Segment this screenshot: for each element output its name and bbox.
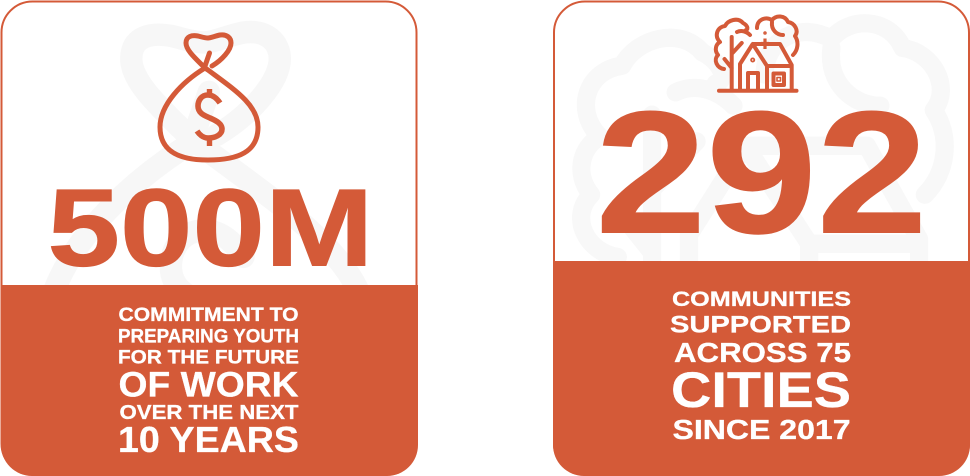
text: commitment description: 10 YEARS: [118, 419, 299, 460]
text: commitment description: PREPARING YOUTH: [118, 326, 299, 348]
text: communities description: ACROSS 75: [674, 337, 851, 368]
text: commitment description: FOR THE FUTURE: [118, 348, 299, 368]
icon: money bag: [160, 35, 258, 160]
watermark: house and trees: [581, 23, 945, 354]
figure: 500M: 500M: [48, 166, 374, 290]
figure: 292: 292: [596, 74, 928, 270]
icon: house and trees: [716, 16, 797, 91]
text: commitment description: [118, 305, 299, 460]
text: commitment description: OF WORK: [118, 366, 298, 404]
text: commitment description: OVER THE NEXT: [120, 402, 298, 424]
text: communities description: [670, 286, 851, 445]
watermark: money bag: [176, 120, 213, 141]
text: communities description: COMMUNITIES: [672, 286, 851, 311]
text: communities description: CITIES: [671, 361, 851, 418]
text: communities description: SUPPORTED: [670, 312, 851, 339]
text: communities description: SINCE 2017: [672, 414, 850, 445]
band: description background: [1, 285, 418, 476]
panel: 500M commitment: [1, 2, 418, 476]
panel: 292 communities: [553, 2, 970, 476]
text: commitment description: COMMITMENT TO: [118, 305, 298, 326]
band: description background: [553, 261, 970, 476]
